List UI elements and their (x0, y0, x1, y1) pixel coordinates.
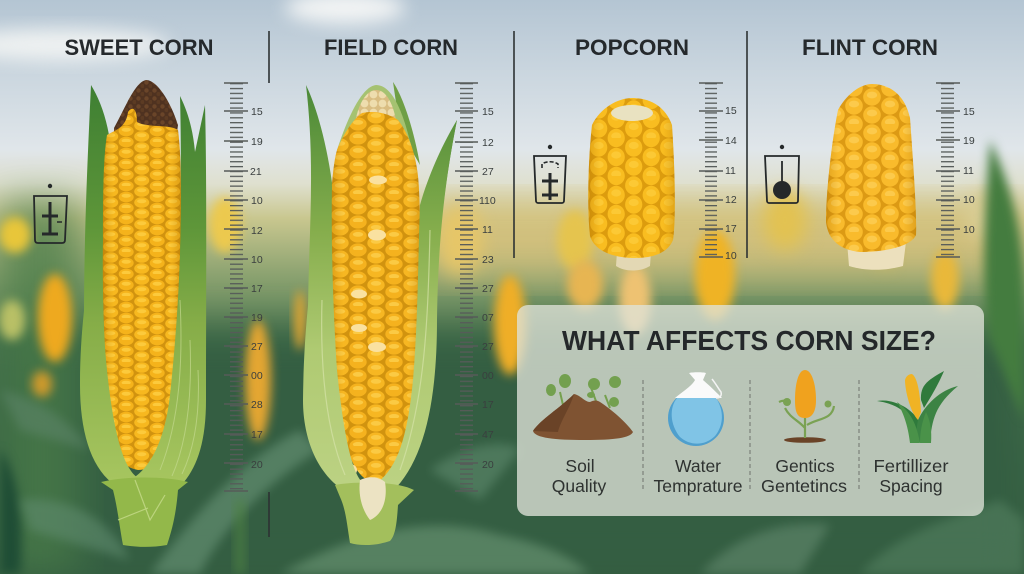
ruler: sweet corn: 19 (251, 136, 263, 148)
ruler: sweet corn: 10 (251, 195, 263, 207)
pale tip kernels (356, 90, 396, 125)
icon: sweet corn gauge (34, 184, 67, 243)
ruler: field corn: 11 (482, 224, 493, 236)
label: genetics (761, 456, 847, 496)
ruler: sweet corn: 27 (251, 341, 263, 353)
stem (616, 250, 651, 270)
icon: fertilizer plant (877, 371, 958, 443)
kernels (826, 84, 916, 252)
label: soil quality: Quality (552, 476, 606, 496)
icon: popcorn gauge (534, 145, 566, 203)
husk wrap left (303, 185, 362, 492)
label: fertilizer spacing (874, 456, 949, 496)
husk wrap right (378, 120, 457, 492)
ruler: field corn: 27 (482, 166, 494, 178)
stalk (335, 483, 414, 545)
ruler: sweet corn: 28 (251, 399, 263, 411)
label: genetics: Gentics (775, 456, 835, 476)
ruler: sweet corn: 15 (251, 106, 263, 118)
label: water temperature: Temprature (654, 476, 742, 496)
ruler: sweet corn (224, 83, 263, 491)
pale top (611, 105, 653, 121)
dividers (269, 31, 747, 537)
ruler: flint corn: 11 (963, 165, 974, 177)
ruler: field corn: 20 (482, 459, 494, 471)
icon: water flask (668, 372, 724, 446)
stalk (101, 478, 188, 547)
heading: popcorn: POPCORN (575, 35, 689, 60)
ruler: field corn: 27 (482, 341, 494, 353)
ruler: sweet corn: 20 (251, 459, 263, 471)
pale kernels (343, 176, 387, 476)
ruler: field corn: 110 (479, 195, 496, 207)
ruler: popcorn: 15 (725, 105, 737, 117)
ruler: sweet corn: 00 (251, 370, 263, 382)
ruler: sweet corn: 19 (251, 312, 263, 324)
husk leaves back (84, 85, 111, 320)
heading: flint corn: FLINT CORN (802, 35, 938, 60)
label: genetics: Gentetincs (761, 476, 847, 496)
ruler: field corn: 17 (482, 399, 494, 411)
husk leaves back (306, 85, 333, 320)
label: water temperature (654, 456, 742, 496)
ruler: field corn: 15 (482, 106, 494, 118)
ruler: sweet corn: 12 (251, 225, 263, 237)
ruler: sweet corn: 21 (250, 166, 262, 178)
icon: flint corn gauge (765, 145, 799, 203)
ruler: field corn: 00 (482, 370, 494, 382)
panel: what affects corn size (517, 305, 984, 516)
ruler: flint corn: 15 (963, 106, 975, 118)
label: fertilizer spacing: Fertillizer (874, 456, 949, 476)
label: fertilizer spacing: Spacing (879, 476, 943, 496)
husk wrap left (80, 190, 138, 483)
brown tip (114, 80, 178, 140)
ruler: flint corn: 19 (963, 135, 975, 147)
label: soil quality (552, 456, 606, 496)
ruler: popcorn: 10 (725, 250, 737, 262)
ruler: field corn: 12 (482, 137, 494, 149)
ruler: flint corn: 10 (963, 194, 975, 206)
ruler: flint corn: 10 (963, 224, 975, 236)
kernels (331, 112, 420, 482)
ruler: sweet corn: 17 (251, 283, 263, 295)
ruler: popcorn (699, 83, 737, 262)
husk wrap right (126, 215, 206, 482)
panel heading: WHAT AFFECTS CORN SIZE? (562, 325, 936, 356)
ruler: popcorn: 12 (725, 194, 737, 206)
ruler: field corn: 23 (482, 254, 494, 266)
ruler: field corn: 47 (482, 429, 494, 441)
ruler: sweet corn: 10 (251, 254, 263, 266)
ruler: field corn: 27 (482, 283, 494, 295)
ruler: sweet corn: 17 (251, 429, 263, 441)
ruler: popcorn: 11 (725, 165, 736, 177)
ruler: field corn: 07 (482, 312, 494, 324)
label: water temperature: Water (675, 456, 721, 476)
ruler: popcorn: 17 (725, 223, 737, 235)
ruler: flint corn (936, 83, 975, 257)
heading: field corn: FIELD CORN (324, 35, 458, 60)
stem (847, 242, 906, 270)
corn: field corn (303, 82, 457, 545)
label: soil quality: Soil (565, 456, 595, 476)
kernels (103, 109, 181, 470)
icon: genetics plant (779, 370, 834, 443)
kernels (588, 98, 675, 258)
ruler: field corn (455, 83, 496, 491)
heading: sweet corn: SWEET CORN (64, 35, 214, 60)
icon: soil (533, 374, 633, 440)
corn: flint corn (826, 84, 916, 270)
corn: popcorn (588, 98, 675, 270)
corn: sweet corn (80, 80, 206, 547)
ruler: popcorn: 14 (725, 135, 737, 147)
